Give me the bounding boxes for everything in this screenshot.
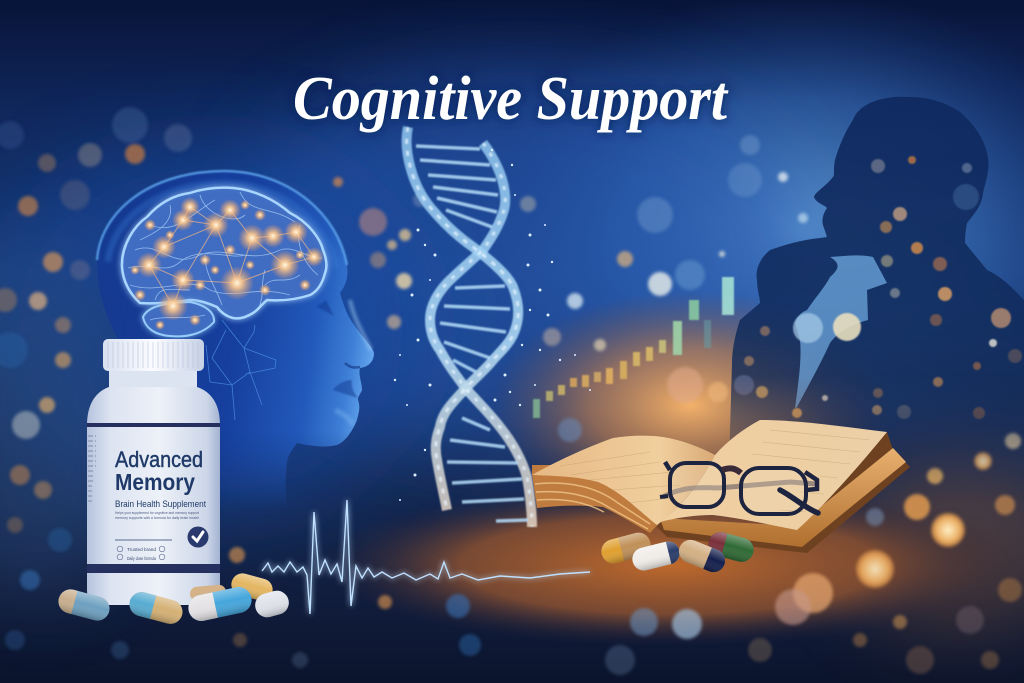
label text: Memory [115,469,195,495]
label text: memory supports with a formula for daily brain health [115,516,199,520]
capsule: green [706,529,756,565]
icon: glowing brain [122,188,326,336]
capsule: navy and tan [675,536,729,576]
capsule: blue and amber [127,589,185,627]
capsule: amber and white [229,571,275,603]
brain light nodes [130,197,324,330]
icon: eyeglasses [660,462,818,514]
brain network lines [149,207,314,306]
bottle body [87,387,220,605]
icon: glowing head profile [97,171,374,515]
gap between arm and torso [795,255,887,408]
bokeh lights: right [520,135,1022,675]
capsule: amber [599,530,653,566]
supplement bottle [87,339,220,605]
DNA sparkles [394,149,591,501]
label text: Brain Health Supplement [115,499,206,510]
neural fibres in neck [206,320,276,420]
pills on book side [599,529,756,576]
wooden desk surface [320,483,1020,647]
label text [115,447,206,561]
bar chart: rising market candles [533,277,734,418]
bokeh lights: left [0,107,481,668]
label text: Helps your supplement for cognitive and memory support [115,511,199,515]
label text: Advanced [115,447,203,472]
icon: check badge [188,526,208,548]
icon: DNA double helix [394,127,591,527]
icon: thinking person silhouette [728,97,1024,500]
capsule: white and blue [186,585,254,623]
title: Cognitive Support [293,65,729,133]
capsule: tan and blue [56,587,112,623]
pills around bottle [56,571,292,627]
capsule: white [630,539,682,573]
ECG heartbeat line [262,500,590,614]
label text: Daily dose formula [127,556,156,561]
capsule: tan behind [189,584,227,601]
open book [532,420,910,553]
label text: Trusted brand [127,547,157,552]
bottle cap [103,339,204,392]
capsule: white [252,588,292,620]
label stripes [87,423,220,573]
